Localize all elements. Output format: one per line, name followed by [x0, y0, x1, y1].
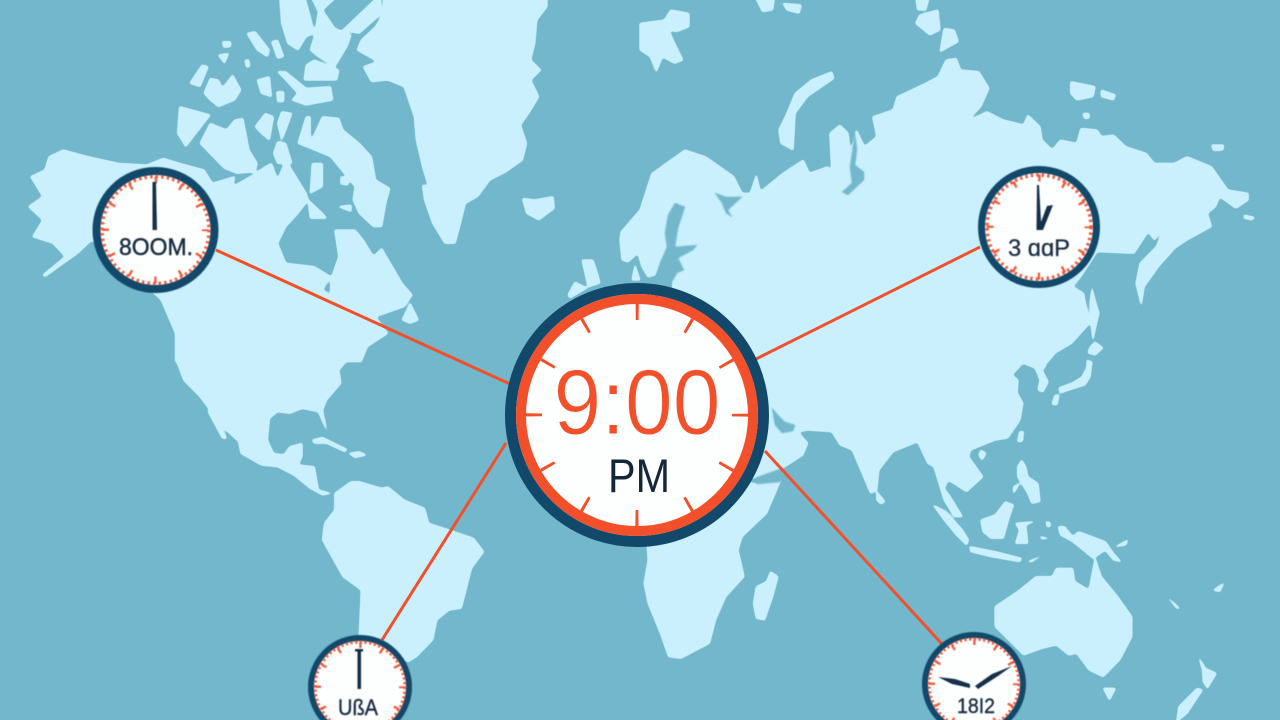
- label: bottom right clock: 18I2: [957, 695, 995, 718]
- map: inland seas: [656, 133, 864, 484]
- label: top left clock: 8OOM.: [119, 234, 193, 261]
- clock: bottom right: [925, 635, 1023, 720]
- main clock navy rim: [510, 288, 764, 542]
- clock: top right: [982, 170, 1096, 284]
- clock: top left: [96, 171, 214, 289]
- clock: bottom left: [311, 638, 409, 720]
- label: top right clock: 3 ɑɑP: [1008, 235, 1070, 262]
- main clock time: 9:00: [554, 350, 720, 454]
- map: Central and South America: [176, 358, 484, 662]
- main clock: 9:00 PM: [510, 288, 764, 542]
- map: North America north, Greenland and Arctic islands: [29, 0, 554, 362]
- map: Europe, British Isles and Japan: [568, 173, 1103, 440]
- connector lines: [216, 247, 980, 644]
- map: Asia south, Arabia, Africa, Indonesia, Australia: [640, 358, 1224, 720]
- main clock orange ring: [521, 299, 753, 531]
- label: bottom left clock: UßA: [338, 695, 378, 720]
- map: Eurasia north and Arctic islands: [640, 0, 1254, 362]
- main clock hour ticks: [534, 312, 740, 518]
- main clock PM label: PM: [608, 449, 670, 502]
